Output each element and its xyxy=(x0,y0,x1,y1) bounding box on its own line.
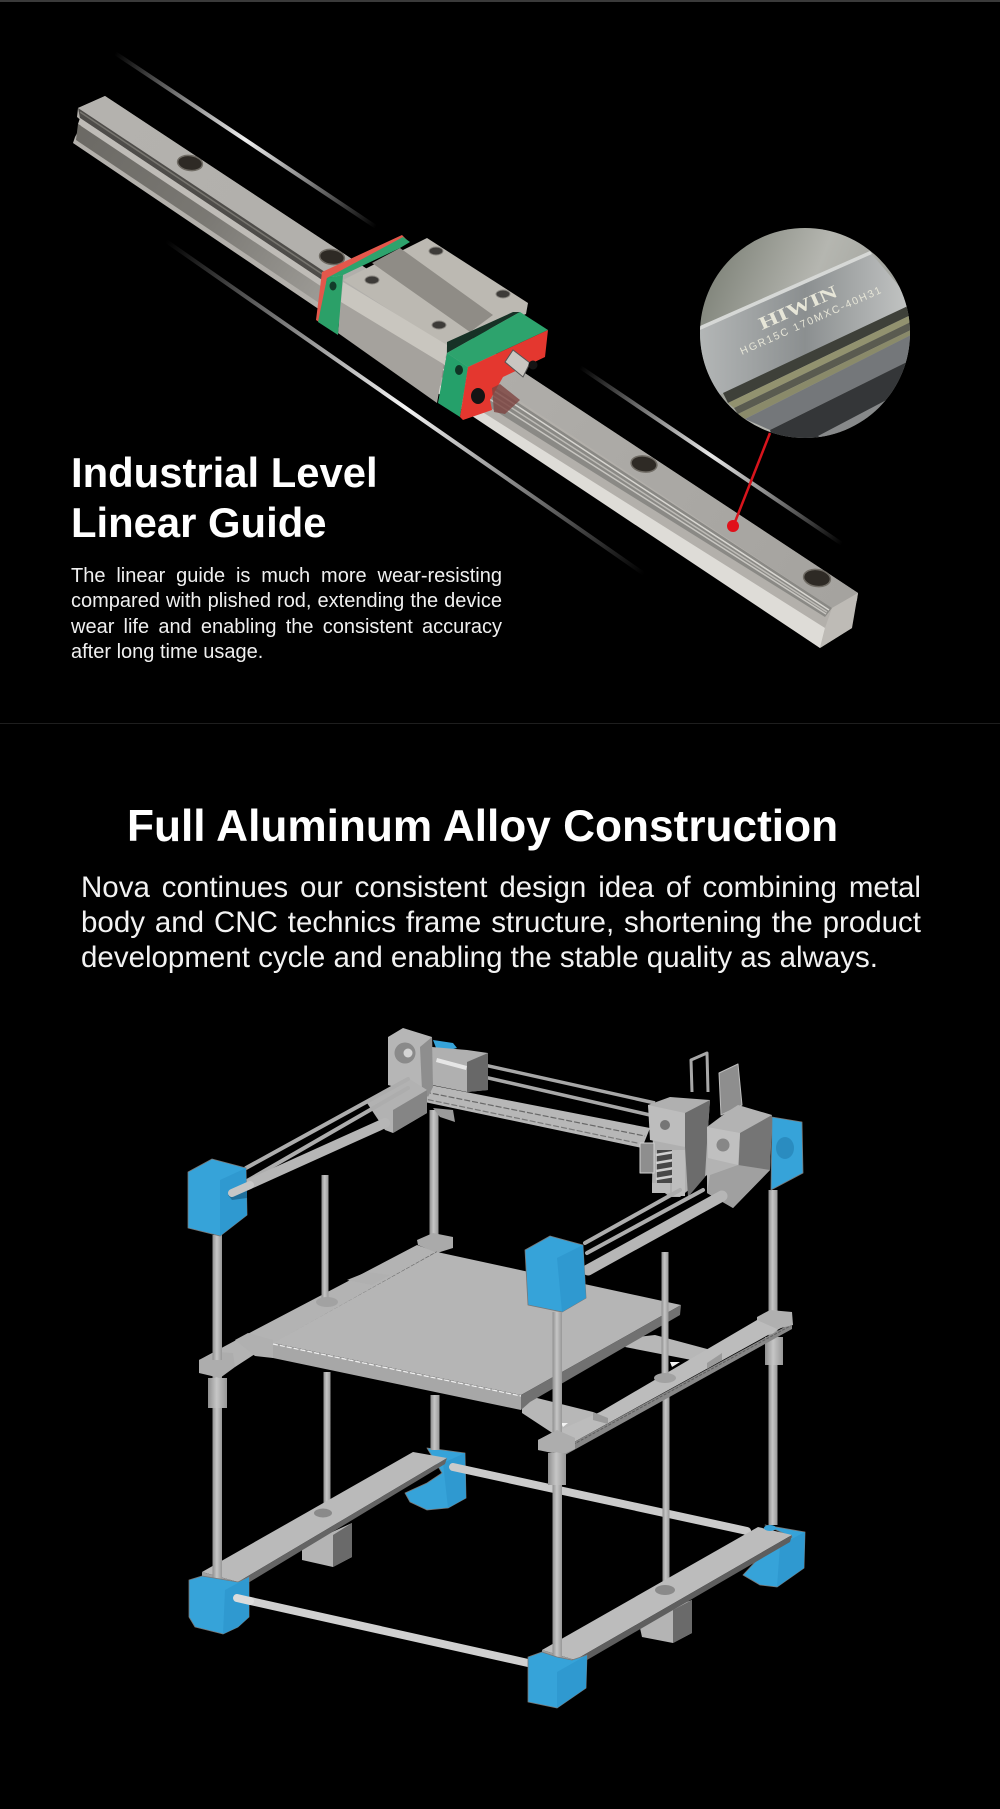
section divider xyxy=(0,723,1000,724)
background streak lines xyxy=(115,53,842,574)
screws xyxy=(365,247,510,329)
left X rods xyxy=(232,1079,408,1192)
text block: linear guide description xyxy=(71,565,502,663)
guide rail xyxy=(73,96,858,648)
top gantry beam and belts xyxy=(410,1050,655,1148)
red callout line xyxy=(727,433,770,532)
lower rear blue corner xyxy=(405,1448,466,1510)
front lead screw xyxy=(538,1312,575,1658)
heading: Industrial Level Linear Guide xyxy=(71,449,378,546)
text block: construction description xyxy=(81,871,921,974)
mounting holes xyxy=(177,154,832,588)
heading: Industrial Level Linear Guide: Linear Guide xyxy=(71,499,326,546)
heading: Full Aluminum Alloy Construction: Full Aluminum Alloy Construction xyxy=(127,802,838,851)
engraved text: HGR15C 170MXC-40H31 xyxy=(738,284,883,358)
front X rods xyxy=(585,1190,722,1270)
blue corner bottom front xyxy=(528,1652,587,1708)
linear guide illustration xyxy=(73,54,910,648)
block side xyxy=(338,282,447,403)
right motor xyxy=(640,1600,692,1643)
carriage block xyxy=(316,235,548,420)
heated bed plate xyxy=(273,1252,681,1410)
heading: Industrial Level Linear Guide: Industrial Level xyxy=(71,449,378,496)
rear lead screw xyxy=(430,1110,440,1450)
rear end plate xyxy=(316,235,410,335)
blue corner top front xyxy=(525,1236,586,1312)
left motor xyxy=(302,1523,352,1567)
print head carriage left xyxy=(640,1097,710,1197)
mid frame right rail xyxy=(538,1310,793,1455)
top border line xyxy=(0,0,1000,2)
blue corner top right xyxy=(771,1117,803,1190)
print head carriage right xyxy=(707,1105,772,1208)
mid frame left rail xyxy=(199,1233,453,1367)
text block: construction description: body and CNC technics frame structure, shortening the product xyxy=(81,906,921,939)
grease nipple xyxy=(505,350,530,377)
right section stripes and white band xyxy=(430,345,858,648)
left thin rod lower xyxy=(324,1372,330,1507)
mid frame cross strips xyxy=(522,1335,722,1440)
magnifier lens: engraved rail marking xyxy=(695,225,915,445)
text block: linear guide description: compared with plished rod, extending the device xyxy=(71,590,502,612)
front cross rod xyxy=(237,1598,528,1663)
left lead screw xyxy=(199,1235,235,1580)
blue corner top left xyxy=(188,1159,250,1236)
bottom left plate xyxy=(202,1452,447,1589)
block top lands xyxy=(343,238,528,347)
text block: linear guide description: The linear guide is much more wear-resisting xyxy=(71,565,502,587)
text block: linear guide description: wear life and enabling the consistent accuracy xyxy=(71,616,502,638)
right thin rod lower xyxy=(662,1397,670,1590)
blue corner bottom right xyxy=(743,1525,805,1587)
blue corner bottom left xyxy=(189,1576,250,1634)
front end plate xyxy=(438,312,548,420)
text block: construction description: development cycle and enabling the stable quality as always. xyxy=(81,941,878,974)
rear cross rod xyxy=(453,1467,747,1531)
thin rods upper with flanges xyxy=(316,1175,676,1383)
text block: construction description: Nova continues our consistent design idea of combining metal xyxy=(81,871,921,904)
rail top face xyxy=(78,96,858,608)
right lead screw xyxy=(765,1190,783,1525)
left section groove and stone band xyxy=(76,108,340,317)
rear blue corner top xyxy=(433,1040,457,1053)
engraved text: HIWIN xyxy=(755,281,840,334)
rear motor xyxy=(432,1047,488,1092)
rear gantry mount xyxy=(367,1028,455,1133)
bottom right plate xyxy=(542,1525,792,1667)
extruder bracket plates xyxy=(691,1053,742,1115)
text block: linear guide description: after long time usage. xyxy=(71,641,263,663)
